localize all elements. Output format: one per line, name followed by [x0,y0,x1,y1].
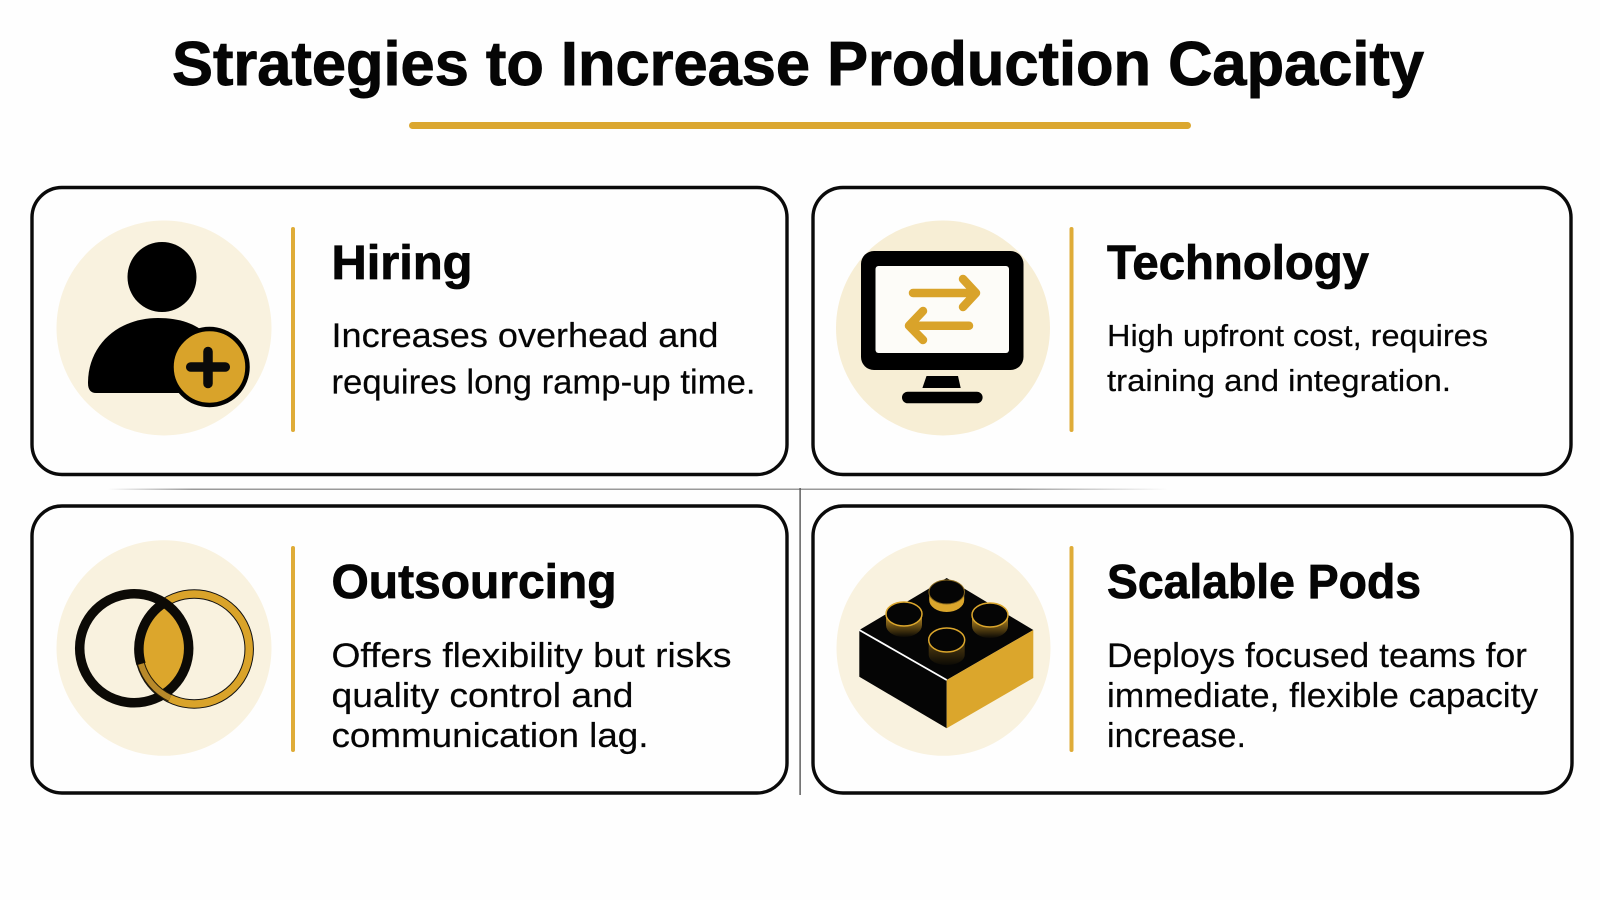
panel: technology [813,188,1571,474]
text: scalable pods description: Deploys focused teams for [1107,637,1527,675]
title: Strategies to Increase Production Capacity [172,30,1425,99]
icon: monitor with exchange arrows [836,220,1050,436]
text: hiring description: Increases overhead and [332,317,718,355]
text: scalable pods description: immediate, flexible capacity [1107,677,1538,715]
divider [291,546,295,752]
icon: overlapping rings [56,540,272,756]
text: outsourcing description: Offers flexibility but risks [332,637,732,675]
icon: person with plus badge [56,220,272,436]
divider [1070,227,1074,432]
heading: technology: Technology [1107,237,1369,290]
text: outsourcing description: quality control and [332,677,634,715]
divider [291,227,295,432]
panel: scalable pods [813,506,1572,793]
text: outsourcing description: communication lag. [332,717,648,755]
icon: building block [836,540,1050,756]
heading: hiring: Hiring [332,237,472,290]
panel: outsourcing [32,506,787,793]
title underline [409,122,1191,129]
heading: scalable pods: Scalable Pods [1107,556,1421,609]
text: scalable pods description: increase. [1107,717,1246,755]
text: technology description: training and integration. [1107,363,1451,398]
text: hiring description: requires long ramp-up time. [332,364,756,402]
heading: outsourcing: Outsourcing [332,556,616,609]
divider [1070,546,1074,752]
text: technology description: High upfront cost, requires [1107,318,1488,353]
panel: hiring [32,188,787,474]
